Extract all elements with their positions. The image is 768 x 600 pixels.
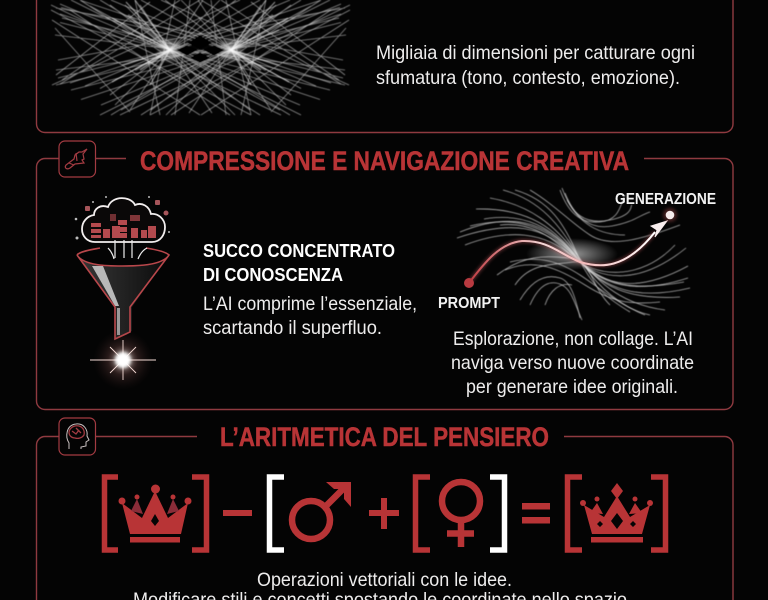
- icon: compression hand: [59, 141, 96, 177]
- panel: top dimensions panel: [36, 0, 733, 132]
- illustration: latent space navigation path: [457, 188, 690, 320]
- text: exploration description: Esplorazione, non collage. L’AI: [453, 328, 693, 350]
- heading: thought arithmetic: L’ARITMETICA DEL PENSIERO: [220, 422, 549, 452]
- term: female symbol in brackets: [416, 477, 504, 550]
- icon: head with brain: [59, 418, 96, 455]
- text: exploration description: [451, 328, 694, 398]
- text: dimensions description: Migliaia di dimensioni per catturare ogni: [376, 42, 695, 64]
- text: concentrated knowledge: L’AI comprime l’essenziale,: [203, 293, 417, 315]
- panel: thought arithmetic frame: [36, 436, 733, 600]
- text: concentrated knowledge: DI CONOSCENZA: [203, 265, 343, 285]
- text: concentrated knowledge: scartando il superfluo.: [203, 317, 382, 339]
- text: dimensions description: [376, 42, 695, 89]
- funnel: [77, 240, 169, 339]
- panel: compression and navigation frame: [36, 158, 733, 410]
- label: prompt: PROMPT: [438, 295, 500, 312]
- equation: vector arithmetic: [104, 477, 666, 550]
- text: exploration description: per generare idee originali.: [466, 376, 678, 398]
- text: vector operations description: Operazioni vettoriali con le idee.: [257, 569, 512, 591]
- text: concentrated knowledge: [203, 241, 417, 339]
- illustration: dimensional line burst: [51, 0, 350, 115]
- term: male symbol in brackets: [270, 477, 351, 550]
- cloud with data blocks: [75, 196, 170, 242]
- heading: compression: COMPRESSIONE E NAVIGAZIONE CREATIVA: [140, 146, 629, 176]
- text: vector operations description: [133, 569, 632, 600]
- text: dimensions description: sfumatura (tono, contesto, emozione).: [376, 67, 680, 89]
- term: king crown in brackets: [104, 477, 206, 550]
- text: exploration description: naviga verso nuove coordinate: [451, 352, 694, 374]
- term: queen crown in brackets: [568, 477, 666, 550]
- label: generazione: GENERAZIONE: [615, 191, 716, 208]
- plus: [369, 498, 399, 529]
- illustration: cloud funnel with spark: [75, 196, 170, 390]
- minus: [223, 510, 252, 516]
- spark: [90, 330, 156, 390]
- equals: [522, 503, 550, 524]
- text: concentrated knowledge: SUCCO CONCENTRATO: [203, 241, 395, 261]
